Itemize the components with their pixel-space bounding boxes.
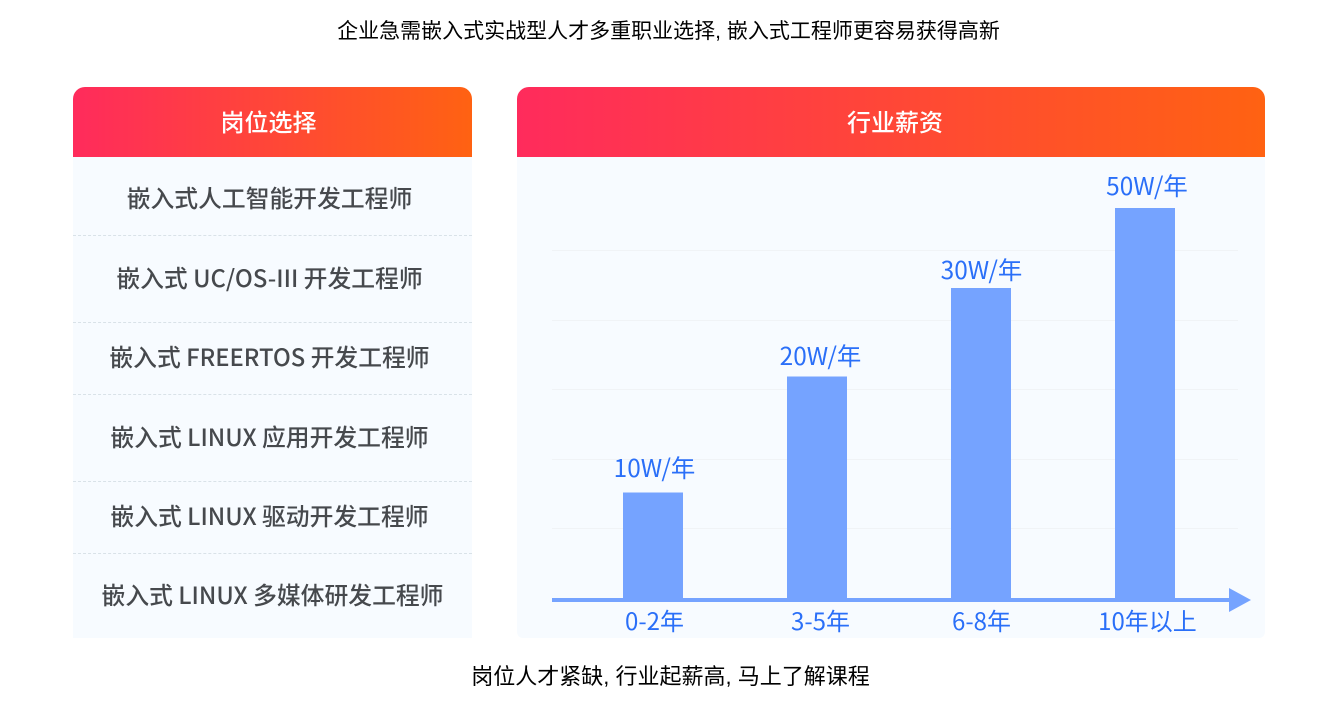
- job panel heading: 岗位选择: [220, 103, 316, 138]
- bar 10+ years: [1115, 208, 1175, 600]
- axis labels: 3-5年: [791, 602, 850, 637]
- bar 3-5 years: [787, 376, 847, 600]
- salary panel heading: [517, 87, 1265, 157]
- job item 6: 嵌入式 LINUX 多媒体研发工程师: [102, 576, 443, 611]
- job item 1: 嵌入式人工智能开发工程师: [127, 179, 412, 214]
- value labels: [614, 168, 1188, 485]
- bar 0-2 years: [623, 492, 683, 600]
- job item 4: 嵌入式 LINUX 应用开发工程师: [110, 418, 429, 453]
- salary panel heading: 行业薪资: [847, 103, 943, 138]
- value labels: 50W/年: [1106, 168, 1188, 203]
- value labels: 20W/年: [780, 338, 861, 373]
- axis labels: 0-2年: [625, 602, 684, 637]
- salary panel background: [517, 157, 1265, 638]
- job item 3: 嵌入式 FREERTOS 开发工程师: [109, 338, 430, 373]
- value labels: 30W/年: [941, 252, 1022, 287]
- value labels: 10W/年: [614, 450, 695, 485]
- bar 6-8 years: [951, 288, 1011, 600]
- job item 5: 嵌入式 LINUX 驱动开发工程师: [110, 497, 429, 532]
- job panel background: [73, 157, 472, 638]
- bar chart: salary by experience: [552, 168, 1251, 637]
- footer caption: 岗位人才紧缺, 行业起薪高, 马上了解课程: [471, 664, 870, 689]
- job panel heading: [73, 87, 472, 157]
- axis labels: [625, 602, 1197, 637]
- axis arrow: [552, 588, 1251, 612]
- title: 企业急需嵌入式实战型人才多重职业选择, 嵌入式工程师更容易获得高新: [337, 20, 1000, 43]
- job item 2: 嵌入式 UC/OS-III 开发工程师: [116, 259, 423, 294]
- axis labels: 10年以上: [1098, 602, 1197, 637]
- axis labels: 6-8年: [952, 602, 1011, 637]
